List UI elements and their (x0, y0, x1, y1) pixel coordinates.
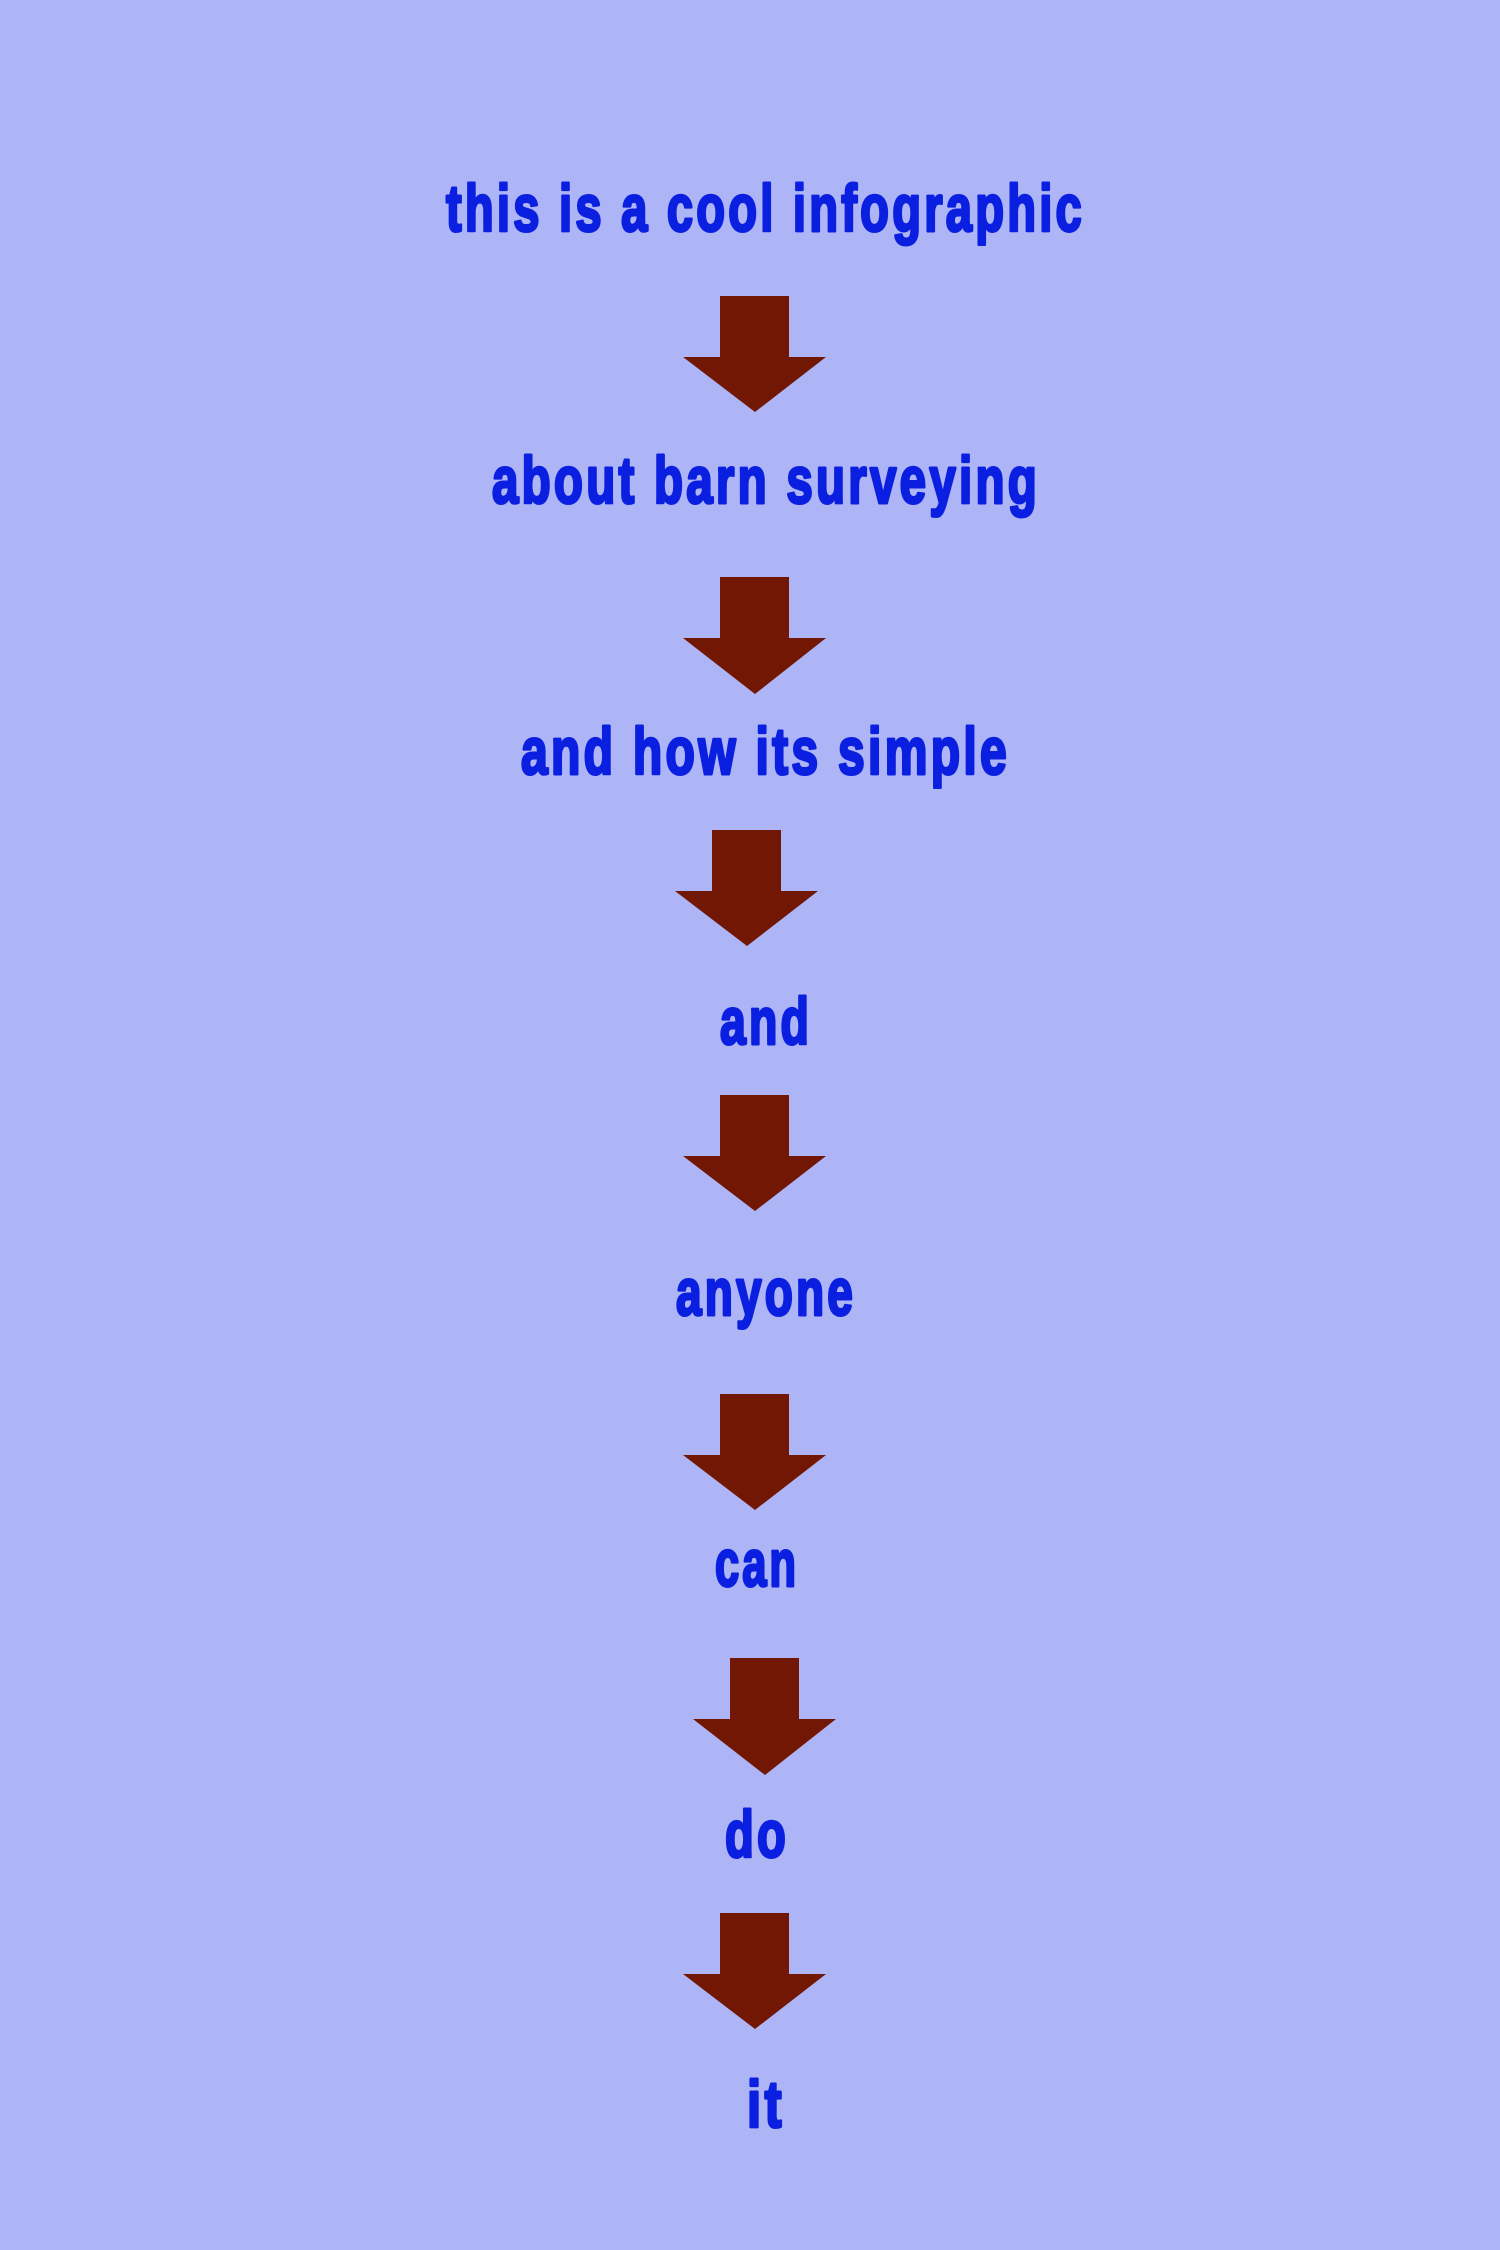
text: and how its simple: and how its simple (521, 714, 1010, 788)
arrow 1 (683, 296, 826, 412)
arrow 5 (683, 1394, 826, 1510)
arrow 7 (683, 1913, 826, 2029)
text: it: it (747, 2067, 785, 2141)
text: and: and (720, 984, 812, 1058)
text: this is a cool infographic: this is a cool infographic (446, 171, 1085, 245)
arrow 4 (683, 1095, 826, 1211)
text: do: do (725, 1797, 789, 1871)
text: about barn surveying: about barn surveying (492, 443, 1040, 517)
text: can: can (715, 1526, 799, 1600)
text: anyone: anyone (676, 1255, 856, 1329)
arrow 3 (675, 830, 818, 946)
arrow 2 (683, 577, 826, 694)
arrow 6 (693, 1658, 836, 1775)
